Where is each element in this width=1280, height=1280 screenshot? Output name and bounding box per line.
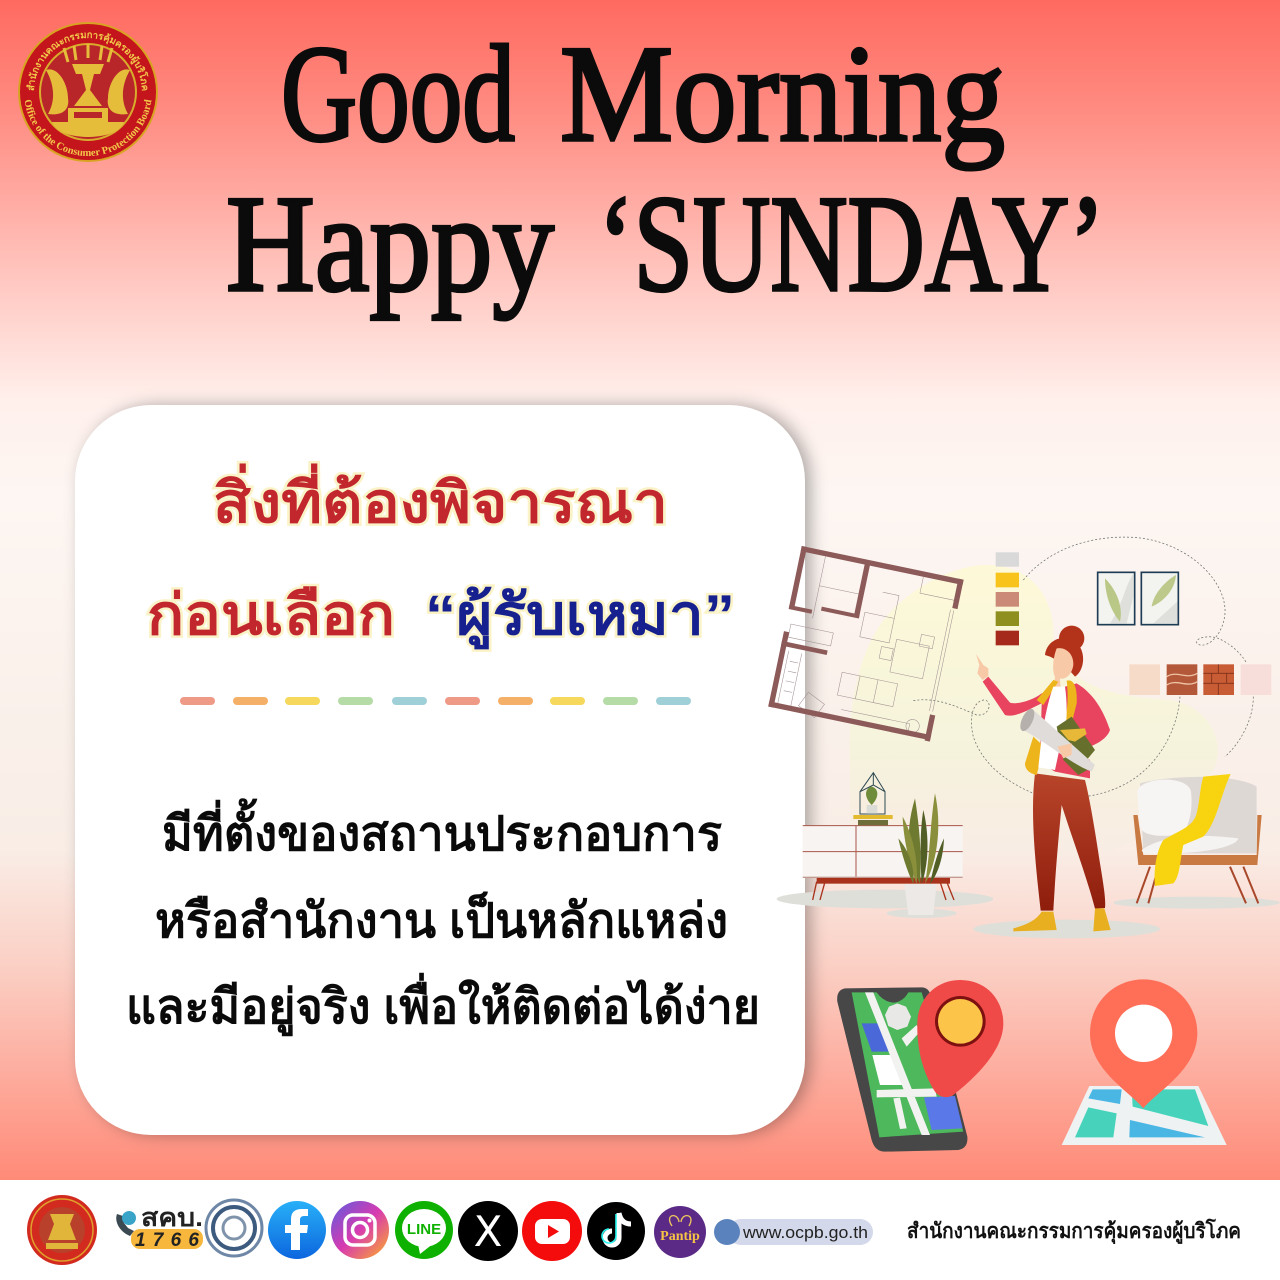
icon: CPB logo [206, 1200, 262, 1256]
logo: Office of the Consumer Protection Board seal [18, 22, 158, 162]
icon: Pantip [654, 1206, 706, 1258]
body line 2: หรือสำนักงาน เป็นหลักแหล่ง [155, 891, 728, 948]
heading [147, 463, 735, 650]
raised hand [976, 654, 988, 680]
heading line 1: สิ่งที่ต้องพิจารณา [213, 463, 668, 534]
hair [1045, 638, 1083, 677]
title line 2 word 1: Happy [226, 167, 554, 320]
icon: flat map with orange pin [1062, 979, 1227, 1145]
panel: white text card [75, 405, 811, 1135]
material swatches [1129, 664, 1271, 695]
สคบ label: สคบ. [141, 1204, 203, 1232]
icons: location on phone and map [837, 979, 1227, 1152]
trousers [1033, 773, 1105, 911]
icon: Pantip: Pantip [660, 1229, 700, 1244]
illustration: interior designer scene [768, 537, 1280, 938]
body line 1: มีที่ตั้งของสถานประกอบการ [162, 798, 722, 861]
yellow throw blanket [1155, 774, 1231, 886]
card body [75, 405, 805, 1135]
organisation name: สำนักงานคณะกรรมการคุ้มครองผู้บริโภค [907, 1218, 1241, 1245]
dashed colour divider [180, 697, 691, 705]
red pin [917, 980, 1003, 1097]
body text [126, 798, 760, 1037]
fabric samples and colour fan [1057, 717, 1095, 775]
dashed path lines [913, 537, 1253, 797]
heading line 2 navy: “ผู้รับเหมา” [425, 583, 735, 650]
icon: X [458, 1201, 518, 1261]
logo: Office of the Consumer Protection Board seal: สำนักงานคณะกรรมการคุ้มครองผู้บริโภค [26, 32, 149, 91]
icon: Instagram [331, 1201, 389, 1259]
jacket and arm [983, 677, 1110, 778]
website pill [714, 1219, 873, 1245]
body line 3: และมีอยู่จริง เพื่อให้ติดต่อได้ง่าย [126, 972, 760, 1037]
person: interior designer [976, 626, 1111, 931]
icon: question bubble [122, 1211, 136, 1225]
armchair [1133, 777, 1262, 903]
website pill: www.ocpb.go.th [742, 1223, 868, 1242]
icon: TikTok [587, 1202, 645, 1260]
icon: LINE: LINE [407, 1221, 441, 1238]
icon: YouTube [522, 1201, 582, 1261]
icon: phone with map and red pin [837, 980, 1003, 1152]
shoes [1013, 908, 1111, 931]
white blouse [1038, 687, 1067, 770]
floor plan [768, 546, 964, 742]
hair bun [1059, 626, 1084, 651]
neck and face [1053, 648, 1073, 690]
potted plant [898, 793, 944, 915]
cabinet [803, 826, 963, 900]
heading line 2 red: ก่อนเลือก [147, 583, 395, 646]
colour palette swatches [996, 552, 1019, 645]
title line 2 word 2: ‘SUNDAY’ [598, 167, 1105, 320]
title line 1 word 2: Morning [560, 17, 1005, 170]
terrarium on books [853, 773, 893, 825]
card shadow [81, 405, 811, 1135]
rolled plans [1017, 707, 1095, 772]
icon: globe [714, 1219, 740, 1245]
icon: LINE [395, 1201, 453, 1259]
1766 number: 1766 [135, 1230, 199, 1251]
footer band [0, 1180, 1280, 1280]
pale background blob [850, 565, 1218, 907]
title line 1 word 1: Good [281, 17, 515, 170]
hotline 1766 badge [116, 1204, 203, 1251]
icon: Facebook [268, 1201, 326, 1259]
hand on roll [1057, 743, 1072, 758]
logo: Office of the Consumer Protection Board seal: Office of the Consumer Protection Board [25, 100, 152, 156]
floor shadows [777, 890, 1280, 938]
title [226, 17, 1105, 320]
footer logo seal [27, 1195, 97, 1265]
icon: phone [116, 1214, 134, 1236]
wall pictures [1098, 572, 1178, 625]
scarf [1025, 680, 1077, 775]
icon: X: X [474, 1207, 502, 1256]
